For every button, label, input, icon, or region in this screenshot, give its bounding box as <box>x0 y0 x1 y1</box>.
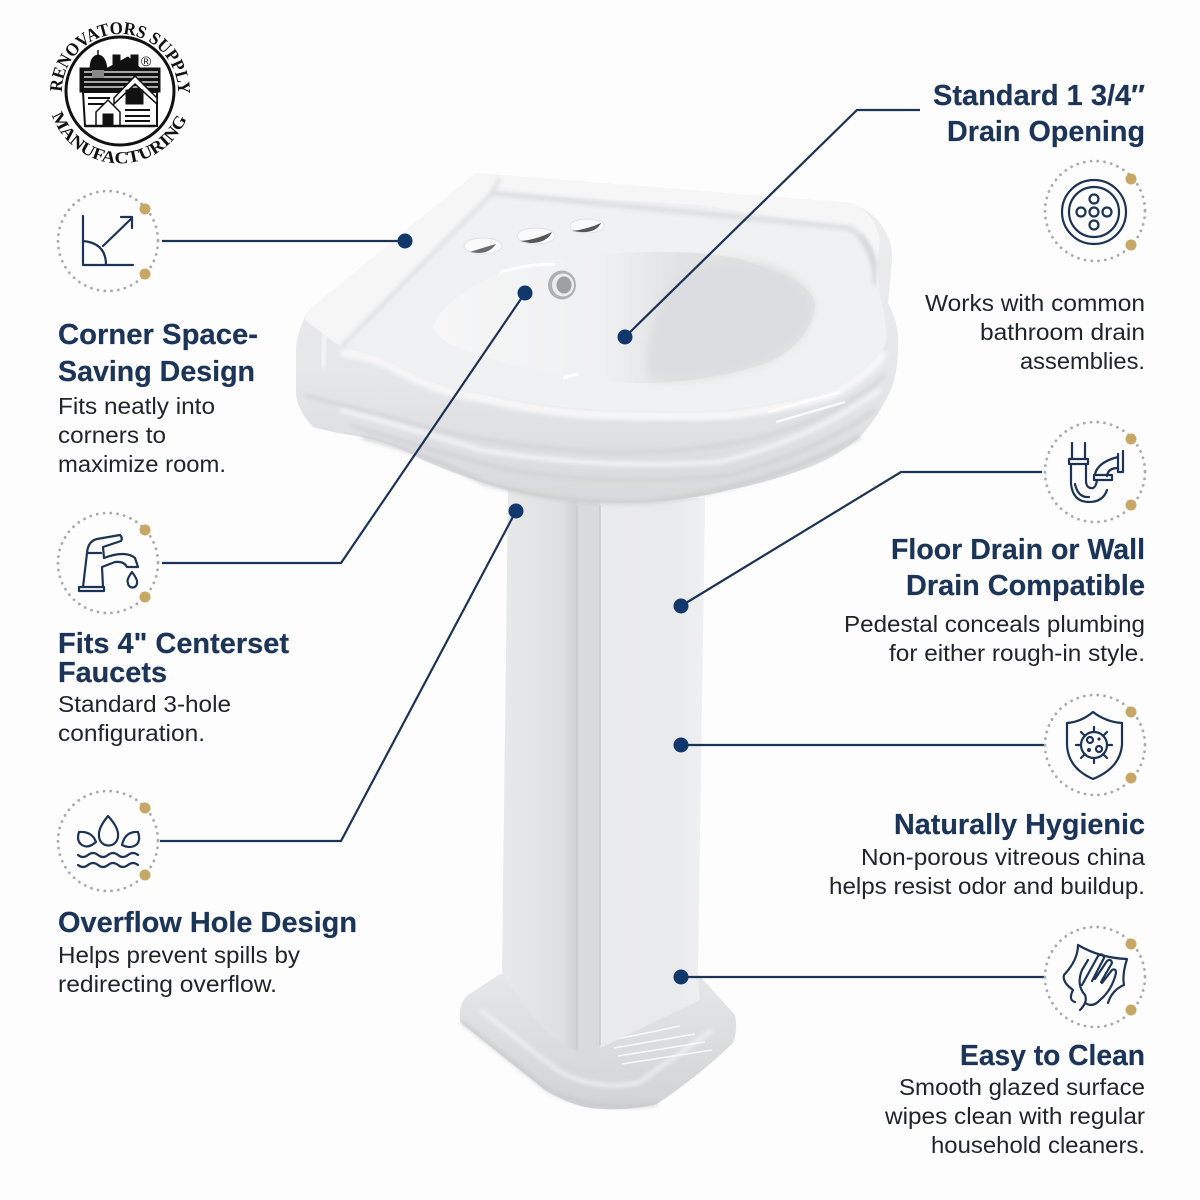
icon: shield with germ <box>1045 695 1145 795</box>
basin outer body <box>296 173 898 503</box>
logo: RENOVATORS SUPPLY <box>50 22 190 94</box>
logo <box>50 22 190 164</box>
description <box>58 942 300 997</box>
heading: Naturally Hygienic <box>894 809 1145 841</box>
rim ridges <box>305 330 885 502</box>
heading: Saving Design <box>58 356 255 388</box>
heading: Drain Opening <box>947 116 1145 148</box>
description <box>925 290 1145 374</box>
description: bathroom drain <box>980 319 1145 345</box>
icon: hand wiping with cloth <box>1045 927 1145 1027</box>
description <box>58 393 226 477</box>
heading <box>891 534 1145 602</box>
callout: easy to clean <box>674 970 1045 984</box>
icon: water drops and waves <box>58 791 158 891</box>
icon: drain <box>1045 161 1145 261</box>
faucet holes <box>464 219 604 254</box>
pedestal base <box>460 974 736 1109</box>
panel: naturally hygienic <box>829 695 1146 899</box>
description: Helps prevent spills by <box>58 942 300 968</box>
description: configuration. <box>58 720 205 746</box>
description: for either rough-in style. <box>889 640 1145 666</box>
description: corners to <box>58 422 166 448</box>
icon: faucet <box>58 513 158 613</box>
description: wipes clean with regular <box>884 1103 1145 1129</box>
callout: overflow <box>160 504 524 841</box>
heading: Faucets <box>58 657 167 689</box>
overflow hole <box>548 270 576 300</box>
description: helps resist odor and buildup. <box>829 873 1145 899</box>
description <box>58 691 231 746</box>
description: Standard 3-hole <box>58 691 231 717</box>
callout: drain opening <box>618 110 920 344</box>
callout: faucets <box>162 286 532 563</box>
panel: fits 4 inch centerset faucets <box>58 513 290 746</box>
description: Works with common <box>925 290 1145 316</box>
icon: p-trap pipe <box>1045 422 1145 522</box>
description <box>844 611 1145 666</box>
heading: Overflow Hole Design <box>58 907 357 939</box>
heading: Fits 4" Centerset <box>58 628 290 660</box>
heading <box>933 80 1145 148</box>
logo: ® <box>141 53 152 69</box>
icon: corner with arrow <box>58 191 158 291</box>
panel: easy to clean <box>884 927 1145 1158</box>
description: Fits neatly into <box>58 393 215 419</box>
panel: corner space-saving design <box>58 191 258 477</box>
description <box>829 844 1146 899</box>
panel: overflow hole design <box>58 791 357 997</box>
description <box>884 1074 1145 1158</box>
description: redirecting overflow. <box>58 971 277 997</box>
pedestal column <box>502 490 705 1062</box>
logo: MANUFACTURING <box>52 110 186 164</box>
heading: Standard 1 3/4″ <box>933 80 1145 112</box>
description: maximize room. <box>58 451 226 477</box>
description: household cleaners. <box>931 1132 1145 1158</box>
description: Pedestal conceals plumbing <box>844 611 1145 637</box>
basin deck <box>341 193 886 411</box>
description: assemblies. <box>1020 348 1145 374</box>
panel: floor or wall drain <box>844 422 1145 666</box>
callout: hygienic <box>674 738 1045 752</box>
heading: Floor Drain or Wall <box>891 534 1145 566</box>
heading <box>58 319 258 388</box>
heading <box>58 628 290 689</box>
callout: corner <box>162 234 412 248</box>
pedestal sink illustration <box>296 173 898 1109</box>
callout lines and dots <box>160 110 1045 984</box>
heading: Easy to Clean <box>960 1040 1145 1072</box>
callout: floor or wall drain <box>674 472 1042 614</box>
heading: Corner Space- <box>58 319 258 351</box>
description: Smooth glazed surface <box>899 1074 1145 1100</box>
bowl <box>433 252 815 383</box>
panel: standard drain opening <box>925 80 1145 374</box>
description: Non-porous vitreous china <box>861 844 1146 870</box>
heading: Drain Compatible <box>906 570 1145 602</box>
